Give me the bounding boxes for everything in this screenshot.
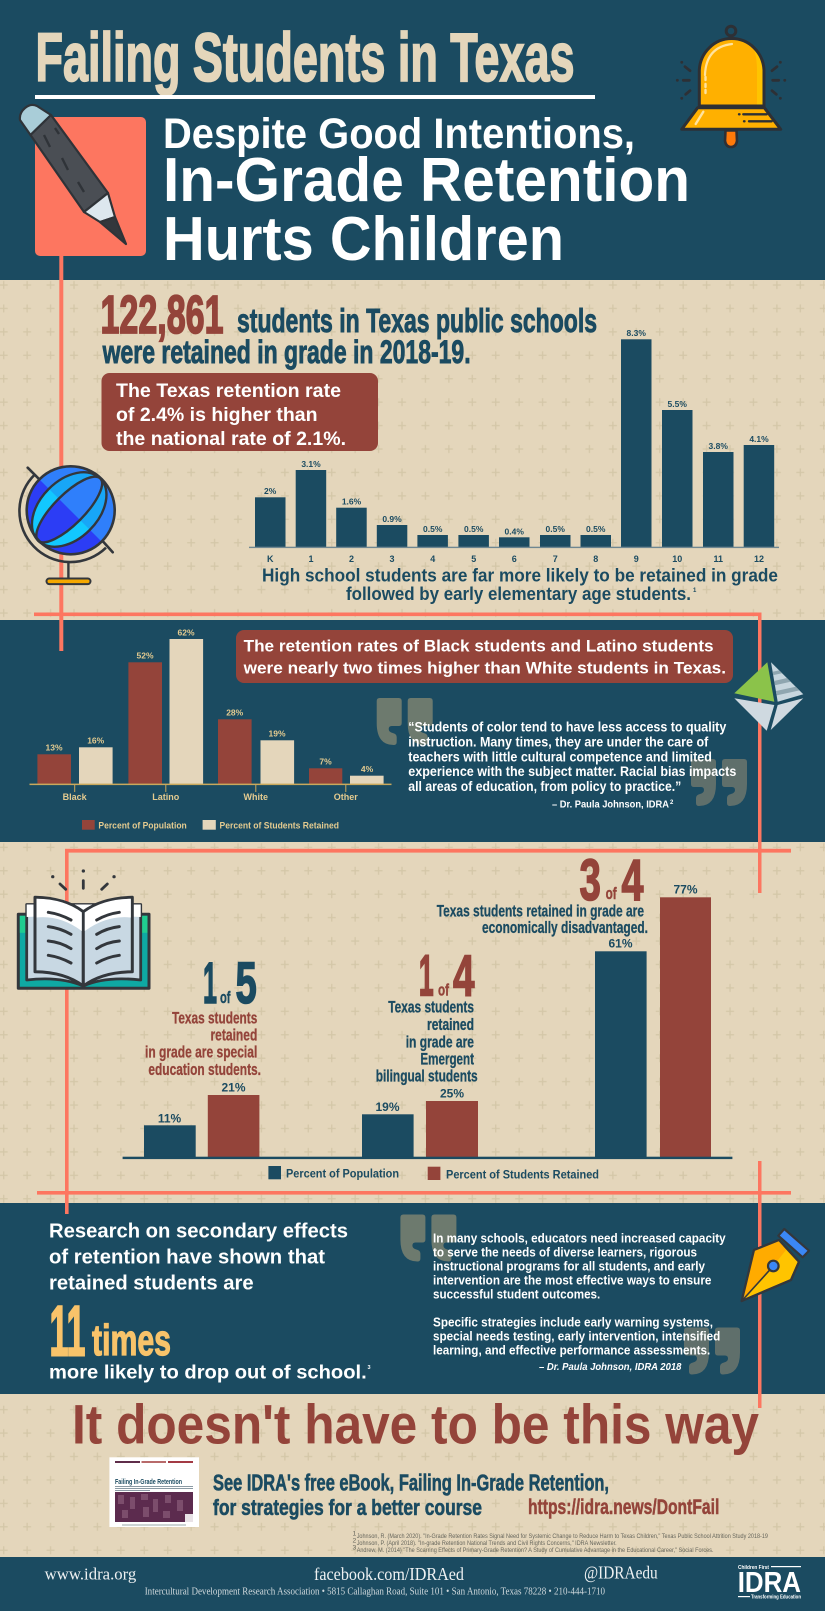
- bar chart: retention by grade: 0.9%: [382, 514, 402, 524]
- call to action: https://idra.news/DontFail: [528, 1495, 719, 1519]
- bar chart: retention by grade: 0.5%: [546, 524, 565, 534]
- panel: header band: [0, 0, 825, 280]
- legend: student groups: [268, 1166, 599, 1181]
- bar chart: race: 7%: [319, 756, 332, 766]
- callout: Texas retention rate: of 2.4% is higher than: [116, 404, 318, 426]
- stat: 11 times: times: [92, 1316, 171, 1365]
- panel: footer band: [0, 1557, 825, 1611]
- bar chart: student groups: 11%: [158, 1111, 182, 1125]
- bar chart: race: 19%: [268, 728, 286, 738]
- icon: open quote: [377, 698, 433, 745]
- bar chart: retention by grade: 2: [349, 554, 354, 564]
- footnotes: 2: [352, 1538, 356, 1544]
- legend: race chart: [82, 820, 339, 831]
- footer contacts: Intercultural Development Research Association • 5815 Callaghan Road, Suite 101 • San Antonio, Texas 78228 • 210-444-1710: [145, 1587, 605, 1598]
- callout: retention rates: [236, 630, 733, 683]
- text: strategies quote: intervention are the most effective ways to ensure: [433, 1273, 711, 1287]
- footer contacts: facebook.com/IDRAed: [314, 1564, 464, 1584]
- stat: 1 of 4: retained: [427, 1016, 474, 1034]
- text: strategies quote: instructional programs for all students, and early: [433, 1259, 705, 1273]
- stat: 1 of 4: bilingual students: [376, 1068, 478, 1086]
- heading: [163, 110, 690, 274]
- bar chart: retention by grade: 10: [672, 554, 682, 564]
- legend: student groups: Percent of Students Retained: [446, 1169, 599, 1181]
- bar chart: retention by grade: 3: [389, 554, 395, 564]
- bar chart: race: [30, 628, 392, 802]
- bar chart: retention by grade: 5: [471, 554, 476, 564]
- bar chart: retention by grade: K: [267, 554, 274, 564]
- text: research on secondary effects: retained students are: [49, 1272, 254, 1294]
- bar chart: student groups: 25%: [440, 1087, 464, 1101]
- footnotes: 1: [352, 1530, 356, 1538]
- text: strategies quote: learning, and effective performance assessments.: [433, 1343, 710, 1357]
- footnotes: Andrew, M. (2014) "The Scarring Effects of Primary-Grade Retention? A Study of Cumulative Advantage in the Educational Career," Social Forces.: [357, 1547, 714, 1554]
- pencil panel: [35, 117, 146, 256]
- stat: 1 of 4: in grade are: [406, 1033, 474, 1051]
- stat: 1 of 4: of: [438, 981, 449, 1000]
- stat: 1 of 4: 4: [453, 944, 474, 1009]
- bar chart: student groups: 21%: [221, 1081, 246, 1095]
- text: strategies quote: successful student outcomes.: [433, 1287, 600, 1301]
- bar chart: student groups: 19%: [375, 1100, 400, 1114]
- panel: dropout band: [0, 1203, 825, 1394]
- stat: 11 times: 11: [50, 1293, 86, 1372]
- call to action: [213, 1470, 719, 1520]
- text: research on secondary effects: of retention have shown that: [49, 1246, 325, 1268]
- chart caption: [262, 566, 778, 604]
- text: strategies quote: to serve the needs of diverse learners, rigorous: [433, 1245, 697, 1259]
- stat: 1 of 5: 1: [203, 951, 217, 1016]
- bar chart: retention by grade: 0.4%: [505, 526, 524, 536]
- bar chart: retention by grade: 0.5%: [464, 524, 484, 534]
- text: Johnson quote: teachers with little cultural competence and limited: [408, 750, 712, 765]
- bar chart: race: 62%: [177, 628, 195, 638]
- stat: 122,861 students: students in Texas public schools: [237, 303, 597, 340]
- text: Johnson quote: [408, 720, 736, 811]
- text: strategies quote: special needs testing, early intervention, intensified: [433, 1329, 720, 1343]
- chart caption: 1: [693, 588, 697, 594]
- text: Johnson quote: experience with the subject matter. Racial bias impacts: [408, 764, 736, 779]
- stat: 3 of 4: economically disadvantaged.: [482, 918, 648, 937]
- bar chart: retention by grade: [249, 328, 779, 564]
- heading: Despite Good Intentions,: [163, 110, 635, 158]
- call to action: See IDRA's free eBook, Failing In-Grade Retention,: [213, 1470, 609, 1496]
- bar chart: race: Other: [334, 792, 358, 802]
- logo: IDRA: Children First: [738, 1565, 769, 1571]
- bar chart: race: 52%: [136, 650, 154, 660]
- bar chart: retention by grade: 4.1%: [749, 434, 769, 444]
- chart caption: High school students are far more likely to be retained in grade: [262, 566, 778, 586]
- legend: student groups: Percent of Population: [286, 1169, 399, 1181]
- text: strategies quote: Specific strategies include early warning systems,: [433, 1315, 713, 1329]
- icon: close quote: [684, 1328, 740, 1374]
- headline: it doesn't have to be this way: It doesn't have to be this way: [72, 1392, 759, 1455]
- callout: retention rates: The retention rates of Black students and Latino students: [244, 637, 714, 656]
- stat: 1 of 5: education students.: [148, 1061, 261, 1079]
- stat: 1 of 5: 5: [236, 951, 257, 1016]
- icon: close quote: [691, 759, 747, 806]
- bar chart: retention by grade: 1.6%: [342, 496, 362, 506]
- stat: 1 of 5: of: [220, 988, 231, 1007]
- bar chart: race: 16%: [87, 736, 105, 746]
- icon: fountain pen nib: [742, 1229, 809, 1301]
- bar chart: retention by grade: 8: [593, 554, 598, 564]
- stat: 3 of 4: 4: [622, 848, 644, 913]
- text: strategies quote: [433, 1231, 726, 1373]
- bar chart: retention by grade: 3.1%: [301, 459, 321, 469]
- text: Johnson quote: 2: [670, 800, 674, 806]
- text: strategies quote: In many schools, educators need increased capacity: [433, 1231, 726, 1245]
- icon: bell: [677, 26, 785, 147]
- icon: open quote: [400, 1214, 456, 1262]
- bar chart: retention by grade: 0.5%: [586, 524, 606, 534]
- logo: IDRA: IDRA: [738, 1567, 801, 1599]
- icon: open book: [18, 871, 149, 988]
- bar chart: student groups: 61%: [608, 937, 633, 951]
- connector lines: [34, 250, 791, 1408]
- call to action: for strategies for a better course: [213, 1495, 482, 1520]
- footnotes: Johnson, P. (April 2018). "In-grade Retention National Trends and Civil Rights Concerns," IDRA Newsletter.: [357, 1540, 617, 1547]
- bar chart: race: Black: [63, 792, 88, 802]
- footer contacts: www.idra.org: [45, 1564, 136, 1583]
- bar chart: retention by grade: 5.5%: [668, 399, 687, 409]
- text: Johnson quote: “Students of color tend to have less access to quality: [408, 720, 727, 735]
- heading: Hurts Children: [163, 205, 564, 274]
- stat: 1 of 4: [376, 944, 478, 1086]
- footnotes: 3: [352, 1544, 356, 1552]
- stat: 3 of 4: of: [606, 884, 617, 903]
- stat: 1 of 5: [145, 951, 261, 1079]
- callout: retention rates: were nearly two times higher than White students in Texas.: [243, 658, 726, 677]
- bar chart: retention by grade: 6: [512, 554, 517, 564]
- bar chart: race: 4%: [361, 764, 374, 774]
- bar chart: race: White: [244, 792, 268, 802]
- bar chart: retention by grade: 3.8%: [709, 441, 728, 451]
- stat: 122,861 students: [100, 285, 597, 370]
- bar chart: race: 13%: [45, 742, 63, 752]
- bar chart: retention by grade: 0.5%: [423, 524, 443, 534]
- stat: 3 of 4: Texas students retained in grade are: [437, 902, 644, 921]
- ebook cover: [109, 1457, 199, 1527]
- text: research on secondary effects: [49, 1220, 348, 1294]
- bar chart: retention by grade: 7: [553, 554, 558, 564]
- stat: 11 times: [50, 1293, 171, 1372]
- stat: 3 of 4: 3: [580, 848, 601, 913]
- stat: 1 of 5: retained: [210, 1027, 257, 1045]
- text: more likely to drop out: 3: [368, 1365, 371, 1371]
- callout: Texas retention rate: [102, 373, 378, 451]
- stat: 122,861 students: were retained in grade in 2018-19.: [102, 334, 471, 370]
- bar chart: retention by grade: 1: [308, 554, 314, 564]
- heading: In-Grade Retention: [163, 146, 690, 215]
- stat: 3 of 4: [437, 848, 648, 937]
- stat: 1 of 4: 1: [419, 944, 434, 1009]
- bar chart: race: Latino: [152, 792, 180, 802]
- text: Johnson quote: – Dr. Paula Johnson, IDRA: [552, 800, 669, 811]
- footer contacts: @IDRAedu: [584, 1562, 658, 1582]
- bar chart: retention by grade: 4: [430, 554, 435, 564]
- chart caption: followed by early elementary age students.: [346, 584, 691, 604]
- bar chart: retention by grade: 11: [713, 554, 723, 564]
- ebook cover: Failing In-Grade Retention: [115, 1479, 182, 1486]
- bar chart: retention by grade: 8.3%: [627, 328, 646, 338]
- text: more likely to drop out: more likely to drop out of school.: [49, 1361, 367, 1383]
- stat: 1 of 4: Texas students: [388, 999, 474, 1017]
- stat: 122,861 students: 122,861: [100, 285, 224, 345]
- bar chart: retention by grade: 2%: [264, 486, 277, 496]
- bar chart: retention by grade: 9: [634, 554, 639, 564]
- bar chart: student groups: 77%: [673, 882, 698, 896]
- panel: race band: [0, 620, 825, 842]
- text: research on secondary effects: Research on secondary effects: [49, 1220, 348, 1242]
- footnotes: [352, 1530, 768, 1554]
- stat: 1 of 4: Emergent: [420, 1051, 474, 1069]
- bar chart: retention by grade: 12: [754, 554, 764, 564]
- callout: Texas retention rate: the national rate of 2.1%.: [116, 428, 346, 450]
- text: Johnson quote: all areas of education, from policy to practice.”: [408, 779, 681, 794]
- legend: race chart: Percent of Population: [98, 821, 187, 831]
- bar chart: race: 28%: [226, 708, 244, 718]
- stat: 1 of 5: Texas students: [172, 1009, 257, 1027]
- footer contacts: [45, 1562, 658, 1598]
- icon: paper diamond: [734, 662, 810, 731]
- title underline: [35, 95, 595, 99]
- background: plus pattern: [0, 280, 825, 1557]
- icon: pencil: [20, 105, 126, 244]
- text: strategies quote: – Dr. Paula Johnson, IDRA 2018: [539, 1361, 682, 1373]
- icon: globe: [18, 465, 116, 586]
- legend: race chart: Percent of Students Retained: [220, 821, 339, 831]
- text: Johnson quote: instruction. Many times, they are under the care of: [408, 735, 709, 750]
- stat: 1 of 5: in grade are special: [145, 1044, 257, 1062]
- logo: IDRA: Transforming Education: [751, 1594, 801, 1600]
- callout: Texas retention rate: The Texas retention rate: [116, 380, 341, 402]
- bar chart: student groups: [123, 882, 732, 1159]
